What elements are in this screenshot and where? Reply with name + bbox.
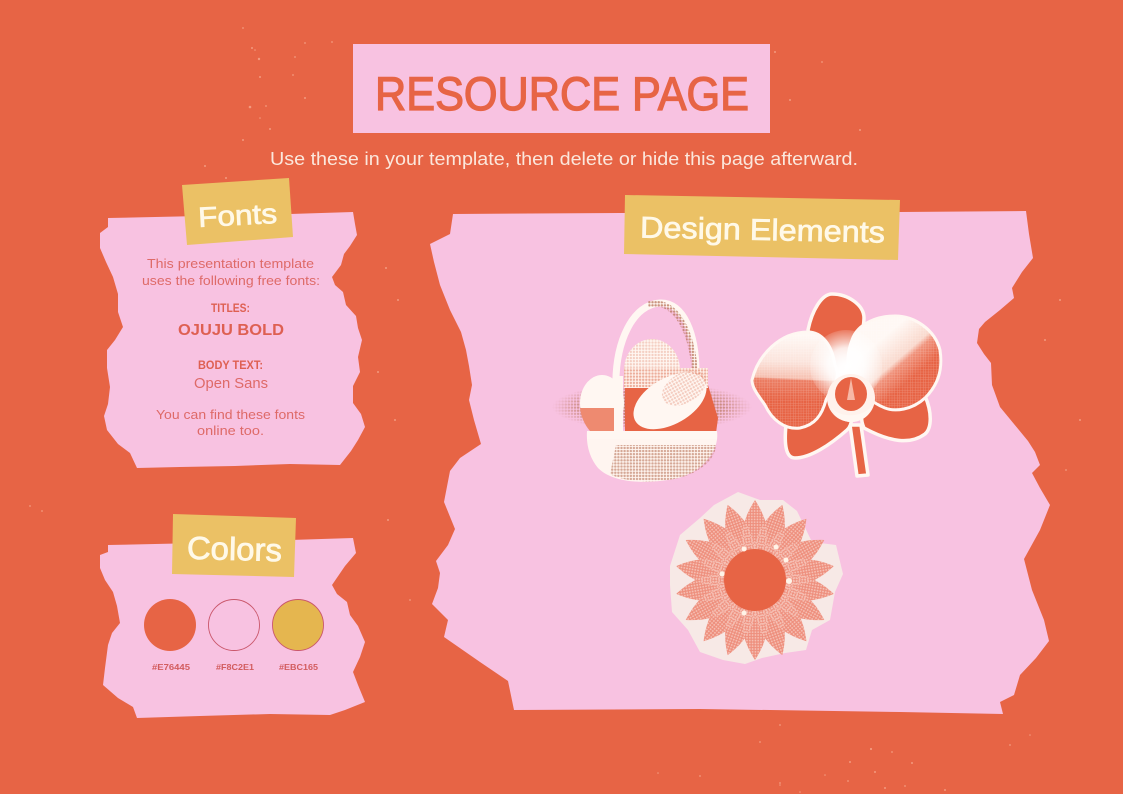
- heading tag: fonts: [182, 178, 293, 245]
- panel: design elements: [430, 195, 1050, 714]
- titles font: OJUJU BOLD: [178, 322, 284, 339]
- heading tag: fonts: Fonts: [197, 198, 278, 233]
- heading tag: colors: Colors: [187, 530, 282, 568]
- fonts note: [156, 407, 306, 438]
- subtitle: Use these in your template, then delete or hide this page afterward.: [270, 149, 858, 169]
- swatch: #F8C2E1: [208, 600, 260, 672]
- titles font: TITLES:: [211, 303, 250, 315]
- panel: colors: [100, 514, 365, 718]
- image: orchid: [752, 294, 941, 476]
- heading tag: colors: [172, 514, 296, 577]
- bottom right sepal: [861, 392, 930, 441]
- top petal: [808, 294, 864, 375]
- title banner: [353, 44, 770, 133]
- orchid lip: [827, 374, 875, 422]
- swatch: #F8C2E1: #F8C2E1: [216, 662, 254, 672]
- image: daisy: [670, 492, 843, 664]
- body font: Open Sans: [194, 376, 268, 392]
- petals: [674, 500, 836, 660]
- right petal: [848, 316, 941, 410]
- torn paper: design elements: [430, 211, 1050, 714]
- sticker backing: [670, 492, 843, 664]
- swatch: #EBC165: #EBC165: [279, 662, 318, 672]
- orchid halftone texture: [752, 332, 837, 428]
- torn paper: colors: [100, 538, 365, 718]
- heading tag: design elements: Design Elements: [640, 211, 885, 250]
- swatch: #E76445: [144, 599, 196, 672]
- title banner: RESOURCE PAGE: [375, 67, 749, 120]
- eggs: [624, 339, 680, 401]
- halftone halo: [556, 385, 750, 430]
- titles font: [178, 303, 284, 339]
- fonts description: [142, 256, 320, 288]
- swatch: #EBC165: [272, 600, 324, 672]
- fonts description: uses the following free fonts:: [142, 273, 320, 288]
- flower centre: [724, 549, 786, 611]
- fonts note: online too.: [197, 423, 264, 438]
- basket handle: [616, 303, 696, 392]
- heading tag: design elements: [624, 195, 900, 260]
- centre glow: [810, 330, 882, 402]
- image: egg basket: [552, 303, 752, 482]
- bottom left sepal: [785, 395, 852, 458]
- swatch: #E76445: #E76445: [152, 662, 190, 672]
- torn paper: fonts: [100, 212, 365, 468]
- basket body: [587, 431, 717, 482]
- petal halftone: [674, 500, 836, 660]
- left petal: [752, 332, 837, 428]
- orchid stem: [850, 425, 868, 476]
- body font: [194, 360, 268, 392]
- body font: BODY TEXT:: [198, 360, 263, 372]
- fonts description: This presentation template: [147, 256, 314, 271]
- panel: fonts: [100, 178, 365, 468]
- fonts note: You can find these fonts: [156, 407, 306, 422]
